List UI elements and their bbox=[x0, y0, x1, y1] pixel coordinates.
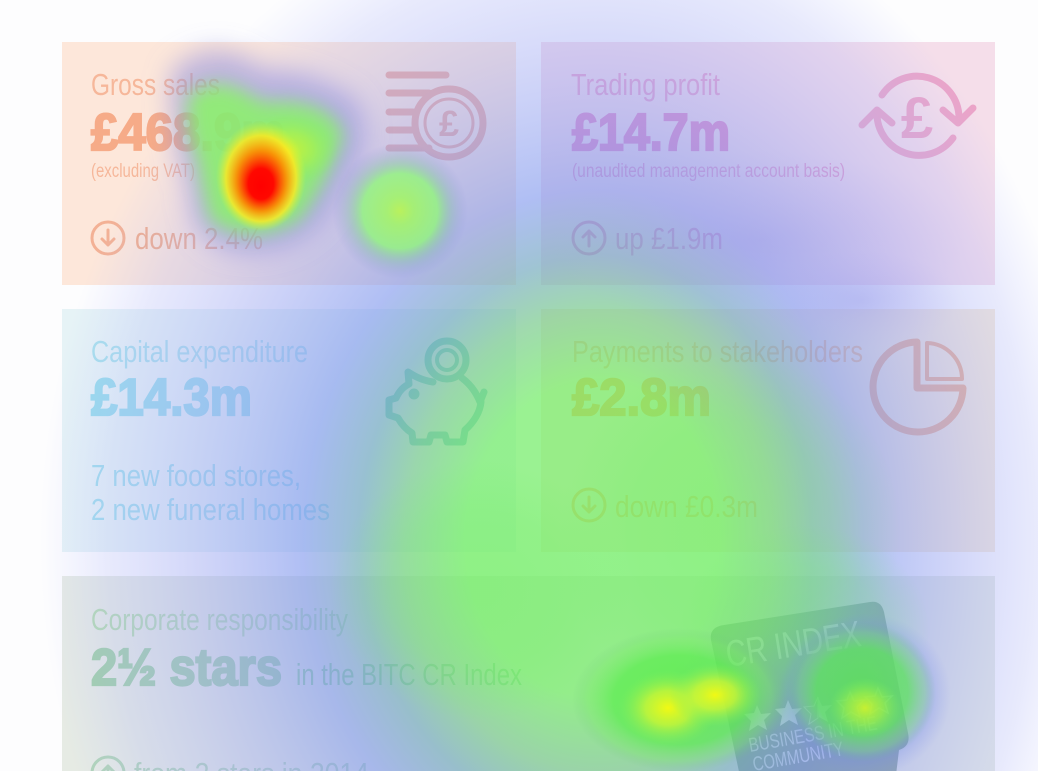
heat: lower left green extension bbox=[330, 460, 630, 720]
panel: capital expenditure bbox=[62, 309, 516, 552]
icon: stack of lines and pound coin bbox=[389, 75, 483, 157]
heat: gross sales yellow wash bbox=[238, 114, 338, 186]
badge: CR Index bbox=[711, 602, 909, 771]
icon: down arrow in circle bbox=[92, 222, 124, 254]
heat: gross sales hot core bbox=[216, 121, 306, 231]
heading: corporate responsibility: Corporate responsibility bbox=[91, 602, 348, 637]
heat: gross sales blue halo bbox=[170, 50, 364, 252]
panel: payments to stakeholders bbox=[541, 309, 995, 552]
badge caption: BUSINESS IN THE bbox=[747, 713, 879, 757]
heading: payments to stakeholders: Payments to stakeholders bbox=[572, 334, 863, 369]
heat: right green extension bbox=[560, 350, 900, 710]
note: excluding VAT: (excluding VAT) bbox=[91, 161, 195, 182]
heat: faint lobes bbox=[550, 150, 970, 350]
icon: circular arrows with pound: £ bbox=[901, 86, 933, 151]
heading: capital expenditure: Capital expenditure bbox=[91, 334, 308, 369]
figure: capital expenditure value: £14.3m bbox=[91, 369, 252, 427]
heat: badge right cluster bbox=[779, 613, 951, 771]
text: new stores: 2 new funeral homes bbox=[91, 492, 330, 527]
icon: stack of lines and pound coin: £ bbox=[439, 103, 459, 144]
panel: trading profit bbox=[541, 42, 995, 285]
text: new stores: 7 new food stores, bbox=[91, 458, 301, 493]
heading: trading profit: Trading profit bbox=[571, 67, 720, 102]
note: unaudited basis: (unaudited management account basis) bbox=[572, 161, 845, 182]
text: in the BITC CR Index: in the BITC CR Index bbox=[296, 657, 522, 692]
badge caption bbox=[747, 713, 879, 771]
change: up £1.9m: up £1.9m bbox=[615, 221, 723, 256]
text: new stores bbox=[91, 458, 330, 527]
panel: corporate responsibility bbox=[62, 576, 995, 771]
heat: broad attention field, right half bbox=[600, 0, 1038, 771]
change: down 2.4%: down 2.4% bbox=[135, 221, 263, 256]
badge stars bbox=[744, 688, 892, 731]
icon: up arrow in circle bbox=[92, 757, 124, 771]
heat: badge green extension bbox=[680, 525, 930, 735]
figure: payments value: £2.8m bbox=[572, 369, 711, 427]
heat: gross sales green region bbox=[188, 84, 344, 234]
icon: up arrow in circle bbox=[573, 222, 605, 254]
change: down £0.3m: down £0.3m bbox=[615, 489, 758, 524]
figure: trading profit value: £14.7m bbox=[572, 104, 730, 162]
icon: piggy bank with coin bbox=[389, 341, 484, 442]
heat: secondary spot bbox=[332, 143, 468, 279]
badge title: CR INDEX bbox=[723, 613, 864, 675]
icon: pie chart bbox=[873, 342, 963, 432]
heat: badge left cluster bbox=[572, 628, 788, 771]
figure: 2½ stars: 2½ stars bbox=[91, 639, 282, 697]
heading: gross sales: Gross sales bbox=[91, 67, 220, 102]
icon: down arrow in circle bbox=[573, 489, 605, 521]
panel: gross sales bbox=[62, 42, 516, 285]
heat: broad attention field, left half bbox=[0, 0, 600, 771]
figure: gross sales value: £468.9m bbox=[91, 104, 285, 162]
icon: circular arrows with pound bbox=[862, 76, 973, 155]
